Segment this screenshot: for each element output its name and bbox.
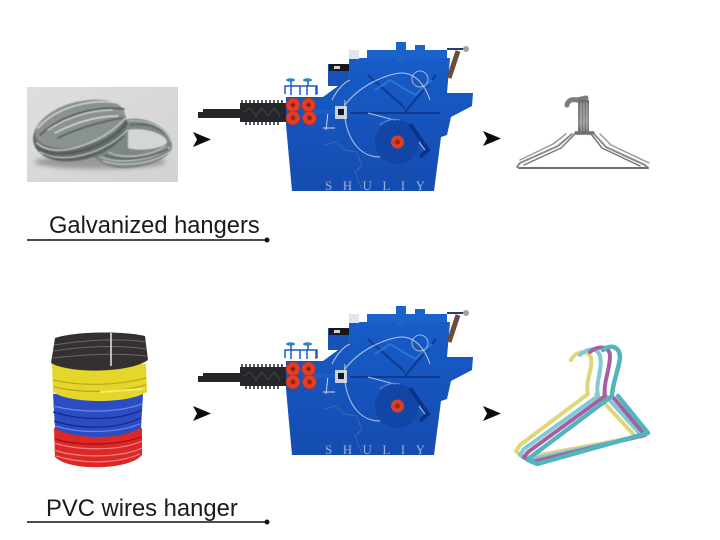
control box <box>328 64 349 86</box>
red rollers <box>286 98 316 125</box>
adjusting knobs <box>285 80 317 95</box>
heading: Galvanized hangers: Galvanized hangers <box>49 213 260 239</box>
heading: PVC wires hanger: PVC wires hanger <box>46 495 238 522</box>
yellow hanger <box>516 352 636 458</box>
teal hanger <box>528 347 648 464</box>
blue coil <box>53 394 143 437</box>
top mechanism <box>349 42 447 62</box>
yellow coil <box>52 364 147 401</box>
machine body <box>286 58 473 191</box>
wire feeder <box>198 100 286 125</box>
red hub <box>391 136 404 148</box>
cam wheel <box>375 120 419 164</box>
machine: hanger making machine (top) <box>198 42 473 193</box>
machine watermark: SHULIY <box>325 178 426 193</box>
black coil <box>51 332 148 371</box>
light blue hanger <box>520 349 642 460</box>
arrow: machine to hanger (bottom) <box>483 406 501 421</box>
purple hanger <box>524 347 645 462</box>
gear outline <box>325 142 362 190</box>
icon: coloured PVC hangers <box>516 347 648 464</box>
machine: hanger making machine (bottom): SHULIY <box>325 442 426 457</box>
guide wires <box>323 73 430 157</box>
photo: galvanized wire coils <box>26 87 178 182</box>
mechanism details <box>350 75 440 113</box>
arrow: wire to machine (bottom) <box>193 406 211 421</box>
center wire cutter <box>335 106 347 119</box>
photo: PVC wire coils stack <box>51 332 148 467</box>
icon: galvanized hanger <box>517 98 649 168</box>
arrow: wire to machine (top) <box>193 132 211 147</box>
arrow: machine to hanger (top) <box>483 131 501 146</box>
red coil <box>54 428 142 467</box>
machine: hanger making machine (bottom) <box>198 306 473 457</box>
